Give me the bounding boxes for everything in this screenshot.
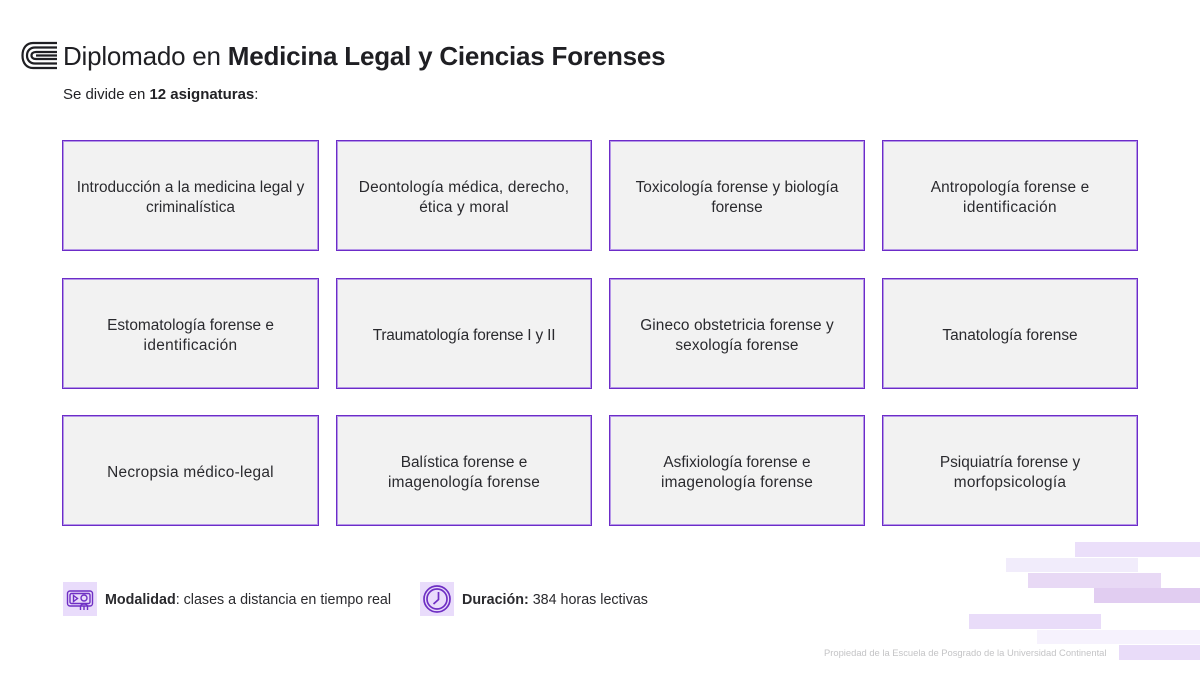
icon: modality (63, 582, 97, 616)
title: Diplomado en Medicina Legal y Ciencias Forenses (63, 41, 665, 71)
panel: subject 5: Estomatología forense e (107, 317, 274, 334)
panel: subject 7: Gineco obstetricia forense y (640, 317, 834, 334)
panel: subject 2: ética y moral (419, 198, 509, 216)
panel: subject 9 (62, 415, 319, 526)
panel: subject 4 (882, 140, 1138, 251)
modality text: Modalidad: clases a distancia en tiempo real (105, 592, 391, 608)
panel: subject 10 (336, 415, 592, 526)
panel: subject 2: Deontología médica, derecho, (359, 179, 569, 196)
panel: subject 7: sexología forense (675, 336, 799, 354)
panel: subject 11: imagenología forense (661, 474, 813, 490)
panel: subject 2 (336, 140, 592, 251)
panel: subject 5 (62, 278, 319, 389)
panel: subject 3: forense (711, 198, 763, 216)
panel: subject 4: Antropología forense e (931, 179, 1089, 196)
panel: subject 1 (62, 140, 319, 251)
decorative bars (969, 542, 1200, 660)
panel: subject 11: Asfixiología forense e (663, 454, 811, 471)
subtitle: Se divide en 12 asignaturas: (63, 86, 258, 103)
panel: subject 4: identificación (963, 198, 1057, 216)
icon: clock (420, 582, 454, 616)
panel: subject 5: identificación (144, 336, 237, 354)
panel: subject 10: Balística forense e (401, 454, 527, 471)
panel: subject 6 (336, 278, 592, 389)
panel: subject 1: criminalística (146, 198, 235, 216)
panel: subject 12: morfopsicología (954, 474, 1066, 490)
panel: subject 6: Traumatología forense I y II (373, 327, 555, 344)
panel: subject 12: Psiquiatría forense y (940, 454, 1080, 471)
icon: logo (21, 42, 57, 70)
panel: subject 7 (609, 278, 865, 389)
panel: subject 1: Introducción a la medicina legal y (77, 179, 304, 196)
panel: subject 8: Tanatología forense (942, 327, 1078, 344)
duration text: Duración: 384 horas lectivas (462, 592, 648, 608)
panel: subject 10: imagenología forense (388, 474, 540, 490)
panel: subject 9: Necropsia médico-legal (107, 464, 274, 481)
footer note: Propiedad de la Escuela de Posgrado de la Universidad Continental (824, 647, 1106, 658)
panel: subject 3: Toxicología forense y biología (636, 179, 838, 196)
panel: subject 3 (609, 140, 865, 251)
panel: subject 8 (882, 278, 1138, 389)
panel: subject 12 (882, 415, 1138, 526)
panel: subject 11 (609, 415, 865, 526)
